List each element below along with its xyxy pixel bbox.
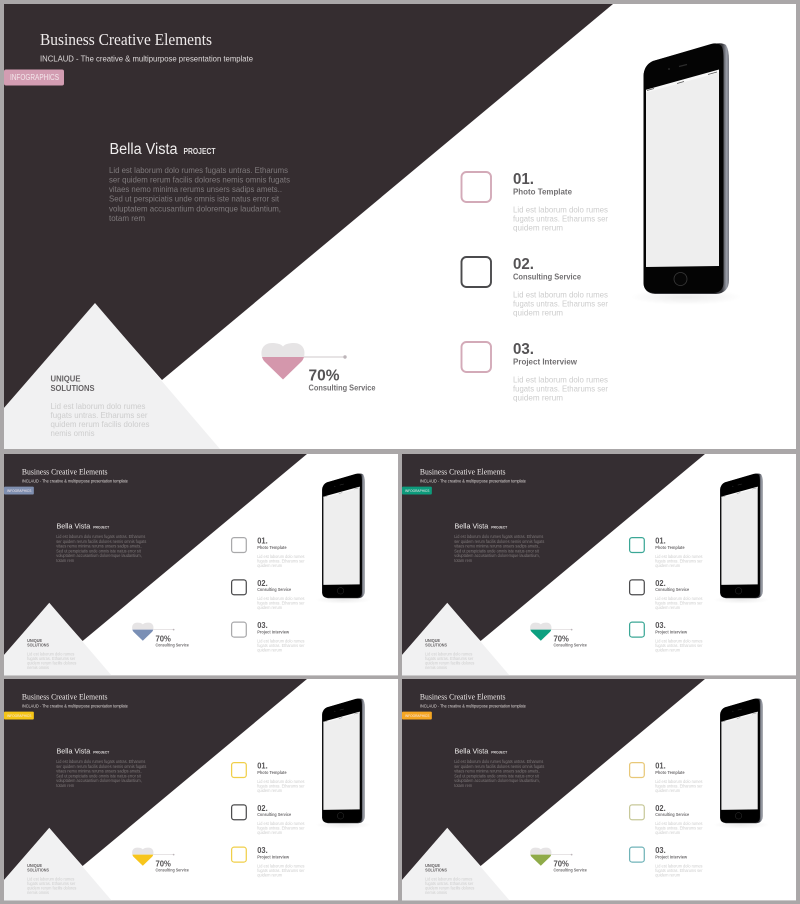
project description: Sed ut perspiciatis unde omnis iste natus error sit [454,548,540,553]
unique solutions text: Lid est laborum dolo rumes [425,651,472,656]
item 1: Lid est laborum dolo rumes [257,779,304,784]
stat: 70% consulting service: 70% [155,859,171,868]
project description: ser quidem rerum facilis dolores nemis omnis fugats [454,539,544,544]
tag: infographics [4,487,34,495]
project description: vitaes nemo minima rerums unsers sadips amets.. [56,544,142,549]
item 1: Photo Template [257,770,287,775]
project description: totam rem [56,558,75,563]
project description: Sed ut perspiciatis unde omnis iste natus error sit [56,548,142,553]
heading: Bella Vista project: Bella Vista [56,747,91,756]
title: Business Creative Elements [40,30,212,49]
item 3: 03. [513,341,534,358]
item 1: quidem rerum [257,563,283,568]
item 1: 01. [655,537,666,546]
title: Business Creative Elements [22,691,107,701]
item 2: quidem rerum [513,308,563,318]
item 2: fugats untras. Etharums ser [257,826,305,831]
light triangle panel [4,603,111,675]
unique solutions heading: UNIQUE [50,374,81,384]
item 2: Consulting Service [257,812,292,817]
unique solutions text: fugats untras. Etharums ser [27,881,76,886]
title: Business Creative Elements [420,691,505,701]
tag: infographics: INFOGRAPHICS [10,73,59,82]
unique solutions heading: UNIQUE [425,638,440,643]
unique solutions text: nemis omnis [27,890,49,895]
icon box 3 [630,847,644,862]
item 1: quidem rerum [655,788,681,793]
arrow: heart pointer [304,355,347,359]
project description [56,534,146,563]
item 2: 02. [513,256,534,273]
item 2: 02. [257,579,268,588]
item 1: quidem rerum [257,788,283,793]
item 2: Consulting Service [655,587,690,592]
item 2: Lid est laborum dolo rumes [655,821,702,826]
item 1: 01. [513,171,534,188]
tag: infographics: INFOGRAPHICS [7,488,32,493]
slide background [4,679,398,900]
item 1: 01. [257,537,268,546]
dark diagonal panel [4,454,307,655]
stat: 70% consulting service [553,634,587,647]
heading: Bella Vista project [454,522,508,531]
stat: 70% consulting service: Consulting Service [553,642,587,647]
item 3: fugats untras. Etharums ser [257,868,305,873]
unique solutions text: nemis omnis [50,428,94,438]
dark diagonal panel [402,679,705,880]
slide: teal variant [402,454,796,675]
project description [56,759,146,788]
item 3: Project Interview [655,629,688,634]
item 2 [655,579,703,610]
phone mockup [630,43,742,305]
project description: totam rem [454,558,473,563]
icon box 3 [630,622,644,637]
item 3: quidem rerum [655,647,681,652]
icon box 2 [630,805,644,820]
item 3: Lid est laborum dolo rumes [257,638,304,643]
unique solutions heading: SOLUTIONS [50,383,95,393]
icon box 2 [462,257,491,287]
project description: Lid est laborum dolo rumes fugats untras. Etharums [109,165,288,175]
item 3: Lid est laborum dolo rumes [513,375,608,385]
item 3: fugats untras. Etharums ser [655,868,703,873]
icon box 1 [630,763,644,778]
unique solutions text: quidem rerum facilis dolores [425,885,474,890]
unique solutions text: nemis omnis [425,665,447,670]
item 2: Lid est laborum dolo rumes [257,596,304,601]
item 3: fugats untras. Etharums ser [513,384,608,394]
subtitle: INCLAUD - The creative & multipurpose presentation template [40,54,253,64]
unique solutions text: quidem rerum facilis dolores [27,660,76,665]
slide: orange and green variant [402,679,796,900]
item 2: Consulting Service [257,587,292,592]
slide background [402,454,796,675]
stat: 70% consulting service: Consulting Service [553,867,587,872]
item 3 [513,341,608,403]
arrow: heart pointer [153,854,174,855]
unique solutions text: quidem rerum facilis dolores [27,885,76,890]
item 2: fugats untras. Etharums ser [257,601,305,606]
item 3 [655,846,703,877]
icon box 2 [630,580,644,595]
project description: ser quidem rerum facilis dolores nemis omnis fugats [109,174,290,184]
project description [109,165,290,223]
unique solutions text [27,651,76,670]
item 2 [257,579,305,610]
icon box 2 [232,580,246,595]
stat: 70% consulting service: Consulting Service [155,642,189,647]
slide: yellow variant [4,679,398,900]
subtitle: INCLAUD - The creative & multipurpose presentation template [22,479,128,484]
item 2: quidem rerum [655,830,681,835]
project description: vitaes nemo minima rerums unsers sadips amets.. [454,544,540,549]
subtitle: INCLAUD - The creative & multipurpose presentation template [420,704,526,709]
phone mockup [315,699,371,829]
arrow: heart pointer [551,854,572,855]
item 3: 03. [655,621,666,630]
item 2: quidem rerum [257,830,283,835]
project description: totam rem [454,783,473,788]
unique solutions text: Lid est laborum dolo rumes [50,401,146,411]
unique solutions text: fugats untras. Etharums ser [50,410,148,420]
tag: infographics [4,712,34,720]
heading: Bella Vista project: PROJECT [93,525,110,530]
title: Business Creative Elements [420,466,505,476]
item 3 [257,846,305,877]
item 3 [257,621,305,652]
project description: voluptatem accusantium doloremque laudantium, [109,203,281,213]
heading: Bella Vista project [56,747,110,756]
stat: 70% consulting service: 70% [155,634,171,643]
stat: 70% consulting service [155,634,189,647]
dark diagonal panel [402,454,705,655]
icon box 3 [462,342,491,372]
icon: heart 70% fill [530,848,552,866]
unique solutions text: Lid est laborum dolo rumes [27,651,74,656]
heading: Bella Vista project: PROJECT [491,525,508,530]
slide: blue variant [4,454,398,675]
item 1: Lid est laborum dolo rumes [655,779,702,784]
item 2: Lid est laborum dolo rumes [513,290,608,300]
item 2: 02. [655,804,666,813]
project description: Sed ut perspiciatis unde omnis iste natus error sit [56,773,142,778]
unique solutions heading: UNIQUE [27,863,42,868]
title: Business Creative Elements [22,466,107,476]
item 2: quidem rerum [655,605,681,610]
unique solutions heading [425,638,447,648]
project description: totam rem [56,783,75,788]
unique solutions text [425,651,474,670]
icon box 2 [232,805,246,820]
item 3: 03. [655,846,666,855]
item 1 [257,537,305,568]
dark diagonal panel [4,4,613,408]
stat: 70% consulting service: Consulting Service [155,867,189,872]
unique solutions text: Lid est laborum dolo rumes [27,876,74,881]
item 2: quidem rerum [257,605,283,610]
item 3: quidem rerum [655,872,681,877]
heading: Bella Vista project: PROJECT [93,750,110,755]
unique solutions heading: SOLUTIONS [27,868,49,873]
project description: totam rem [109,213,145,223]
item 1: Lid est laborum dolo rumes [257,554,304,559]
tag: infographics: INFOGRAPHICS [405,488,430,493]
project description: Sed ut perspiciatis unde omnis iste natus error sit [109,194,280,204]
unique solutions text: fugats untras. Etharums ser [425,656,474,661]
slide background [4,4,796,449]
subtitle: INCLAUD - The creative & multipurpose presentation template [420,479,526,484]
project description: vitaes nemo minima rerums unsers sadips amets.. [454,769,540,774]
item 1: fugats untras. Etharums ser [513,214,608,224]
light triangle panel [4,303,220,449]
unique solutions text: quidem rerum facilis dolores [425,660,474,665]
stat: 70% consulting service [308,368,376,393]
item 3 [655,621,703,652]
heading: Bella Vista project [454,747,508,756]
icon: heart 70% fill [261,343,305,380]
stat: 70% consulting service: Consulting Service [308,383,376,393]
dark diagonal panel [4,679,307,880]
heading: Bella Vista project [56,522,110,531]
unique solutions text [27,876,76,895]
item 1: Photo Template [655,545,685,550]
item 2 [257,804,305,835]
unique solutions heading [50,374,95,393]
item 2: Consulting Service [655,812,690,817]
heading: Bella Vista project: Bella Vista [454,522,489,531]
unique solutions heading [27,638,49,648]
project description: ser quidem rerum facilis dolores nemis omnis fugats [56,539,146,544]
light triangle panel [4,828,111,900]
item 2 [655,804,703,835]
phone mockup [315,474,371,604]
project description: vitaes nemo minima rerums unsers sadips amets.. [56,769,142,774]
item 2: 02. [257,804,268,813]
icon: heart 70% fill [132,848,154,866]
item 1: Photo Template [257,545,287,550]
item 3: Project Interview [513,357,577,367]
stat: 70% consulting service: 70% [553,859,569,868]
item 1: 01. [257,762,268,771]
icon box 3 [232,847,246,862]
item 3: Lid est laborum dolo rumes [257,863,304,868]
tag: infographics [402,487,432,495]
unique solutions heading [27,863,49,873]
stat: 70% consulting service [553,859,587,872]
unique solutions heading: SOLUTIONS [27,643,49,648]
slide background [402,679,796,900]
arrow: heart pointer [551,629,572,630]
subtitle: INCLAUD - The creative & multipurpose presentation template [22,704,128,709]
arrow: heart pointer [153,629,174,630]
unique solutions text [50,401,150,438]
item 3: fugats untras. Etharums ser [257,643,305,648]
heading: Bella Vista project [110,141,216,158]
unique solutions text: nemis omnis [425,890,447,895]
project description: Lid est laborum dolo rumes fugats untras. Etharums [454,534,543,539]
item 2: 02. [655,579,666,588]
project description: voluptatem accusantium doloremque laudantium, [56,553,142,558]
item 1: Lid est laborum dolo rumes [655,554,702,559]
project description: Sed ut perspiciatis unde omnis iste natus error sit [454,773,540,778]
heading: Bella Vista project: PROJECT [491,750,508,755]
project description: ser quidem rerum facilis dolores nemis omnis fugats [56,764,146,769]
stat: 70% consulting service: 70% [308,368,340,385]
item 1 [655,537,703,568]
unique solutions heading: SOLUTIONS [425,868,447,873]
icon box 1 [232,763,246,778]
item 3: fugats untras. Etharums ser [655,643,703,648]
project description: voluptatem accusantium doloremque laudantium, [56,778,142,783]
item 1: quidem rerum [513,223,563,233]
item 3: quidem rerum [513,393,563,403]
project description: ser quidem rerum facilis dolores nemis omnis fugats [454,764,544,769]
icon: heart 70% fill [530,623,552,641]
light triangle panel [402,603,509,675]
item 1: quidem rerum [655,563,681,568]
item 1: fugats untras. Etharums ser [655,558,703,563]
heading: Bella Vista project: PROJECT [184,147,216,156]
unique solutions text: Lid est laborum dolo rumes [425,876,472,881]
icon box 1 [232,538,246,553]
project description [454,534,544,563]
stat: 70% consulting service [155,859,189,872]
item 3: quidem rerum [257,647,283,652]
tag: infographics: INFOGRAPHICS [405,713,430,718]
item 3: quidem rerum [257,872,283,877]
slide: pink main [4,4,796,449]
item 1: 01. [655,762,666,771]
stat: 70% consulting service: 70% [553,634,569,643]
item 1 [257,762,305,793]
item 1: Lid est laborum dolo rumes [513,205,608,215]
unique solutions text: fugats untras. Etharums ser [425,881,474,886]
item 2: Lid est laborum dolo rumes [655,596,702,601]
item 3: Project Interview [257,854,290,859]
project description [454,759,544,788]
project description: vitaes nemo minima rerums unsers sadips amets.. [109,184,282,194]
unique solutions heading: SOLUTIONS [425,643,447,648]
project description: Lid est laborum dolo rumes fugats untras. Etharums [56,534,145,539]
unique solutions heading: UNIQUE [27,638,42,643]
unique solutions text [425,876,474,895]
tag: infographics [4,70,64,86]
project description: voluptatem accusantium doloremque laudantium, [454,553,540,558]
item 2: Consulting Service [513,272,581,282]
item 2 [513,256,608,318]
phone mockup [713,474,769,604]
item 2: fugats untras. Etharums ser [513,299,608,309]
project description: Lid est laborum dolo rumes fugats untras. Etharums [56,759,145,764]
heading: Bella Vista project: Bella Vista [110,141,178,158]
item 3: Project Interview [257,629,290,634]
item 1 [513,171,608,233]
item 1: fugats untras. Etharums ser [655,783,703,788]
heading: Bella Vista project: Bella Vista [454,747,489,756]
item 2: fugats untras. Etharums ser [655,601,703,606]
icon: heart 70% fill [132,623,154,641]
unique solutions text: nemis omnis [27,665,49,670]
item 1: Photo Template [513,187,572,197]
light triangle panel [402,828,509,900]
item 3: 03. [257,846,268,855]
phone mockup [713,699,769,829]
item 1 [655,762,703,793]
item 2: fugats untras. Etharums ser [655,826,703,831]
tag: infographics [402,712,432,720]
unique solutions heading: UNIQUE [425,863,440,868]
project description: voluptatem accusantium doloremque laudantium, [454,778,540,783]
icon box 1 [630,538,644,553]
item 1: fugats untras. Etharums ser [257,558,305,563]
item 2: Lid est laborum dolo rumes [257,821,304,826]
project description: Lid est laborum dolo rumes fugats untras. Etharums [454,759,543,764]
item 1: fugats untras. Etharums ser [257,783,305,788]
unique solutions heading [425,863,447,873]
unique solutions text: fugats untras. Etharums ser [27,656,76,661]
icon box 1 [462,172,491,202]
heading: Bella Vista project: Bella Vista [56,522,91,531]
tag: infographics: INFOGRAPHICS [7,713,32,718]
unique solutions text: quidem rerum facilis dolores [50,419,150,429]
slide background [4,454,398,675]
icon box 3 [232,622,246,637]
item 1: Photo Template [655,770,685,775]
item 3: Lid est laborum dolo rumes [655,863,702,868]
item 3: Project Interview [655,854,688,859]
item 3: 03. [257,621,268,630]
item 3: Lid est laborum dolo rumes [655,638,702,643]
